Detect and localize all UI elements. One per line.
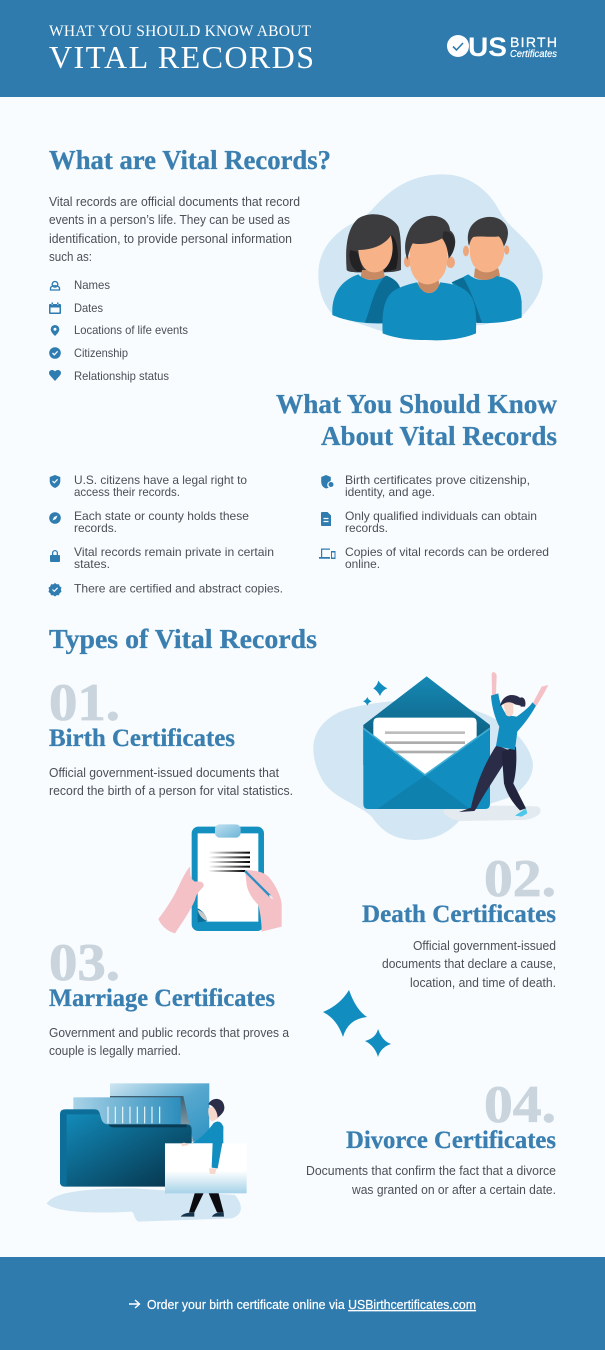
- facts text right column: records.: [345, 521, 388, 535]
- record 01: birth certificates: Official government-issued documents that: [49, 766, 280, 780]
- facts text left column: Vital records remain private in certain: [74, 545, 274, 559]
- icon: arrow: [129, 1300, 140, 1308]
- record 04: divorce certificates: Documents that confirm the fact that a divorce: [306, 1164, 556, 1178]
- intro paragraph: Vital records are official documents that record: [49, 195, 300, 209]
- intro paragraph: identification, to provide personal information: [49, 232, 292, 246]
- man right: [452, 217, 522, 323]
- facts text left column: access their records.: [74, 485, 180, 499]
- facts text right column: online.: [345, 557, 380, 571]
- header title: WHAT YOU SHOULD KNOW ABOUT: [49, 23, 312, 40]
- record 01: birth certificates: record the birth of a person for vital statistics.: [49, 784, 293, 798]
- record 01: birth certificates: Birth Certificates: [49, 725, 235, 752]
- logo: US Birth Certificates: [447, 32, 557, 62]
- illustration: clipboard and hands: [158, 824, 282, 933]
- record 04: divorce certificates: Divorce Certificates: [346, 1127, 556, 1154]
- facts text left column: [74, 473, 283, 596]
- illustration: folder and carrying man: [47, 1083, 247, 1222]
- man centre: [382, 216, 476, 340]
- intro paragraph: such as:: [49, 250, 92, 264]
- facts text right column: Only qualified individuals can obtain: [345, 509, 537, 523]
- heading: What are Vital Records: What are Vital Records?: [49, 145, 331, 175]
- list: personal information: [49, 278, 188, 383]
- logo: US Birth Certificates: US: [468, 32, 507, 62]
- woman: [332, 214, 401, 323]
- record 02: death certificates: 02.: [484, 850, 556, 908]
- record 02: death certificates: location, and time of death.: [410, 976, 556, 990]
- list labels: Dates: [74, 301, 103, 315]
- record 03: marriage certificates: [49, 934, 289, 1058]
- record 02: death certificates: Death Certificates: [362, 901, 556, 928]
- facts text right column: [345, 473, 549, 571]
- heading: Types of Vital Records: Types of Vital Records: [49, 624, 317, 654]
- logo: US Birth Certificates: Certificates: [510, 49, 557, 60]
- header banner: [0, 0, 605, 97]
- list labels: [74, 278, 188, 383]
- cheering woman: [459, 672, 548, 817]
- intro paragraph: events in a person’s life. They can be used as: [49, 213, 290, 227]
- record 03: marriage certificates: couple is legally married.: [49, 1044, 181, 1058]
- icon: sparkles: [323, 990, 391, 1057]
- list labels: Citizenship: [74, 346, 128, 360]
- record 04: divorce certificates: 04.: [484, 1076, 556, 1134]
- record 02: death certificates: documents that declare a cause,: [382, 957, 556, 971]
- footer call to action: Order your birth certificate online via USBirthcertificates.com: [147, 1298, 476, 1312]
- header title: [49, 23, 314, 75]
- heading: What You Should Know About Vital Records: What You Should Know: [276, 389, 558, 419]
- list icons: [49, 282, 61, 381]
- illustration: three people: [318, 174, 543, 340]
- facts text left column: Each state or county holds these: [74, 509, 249, 523]
- record 03: marriage certificates: Marriage Certificates: [49, 985, 275, 1012]
- facts text right column: Birth certificates prove citizenship,: [345, 473, 530, 487]
- list labels: Relationship status: [74, 369, 169, 383]
- illustration: envelope and cheering woman: [313, 672, 548, 840]
- list labels: Names: [74, 278, 110, 292]
- logo: US Birth Certificates: BIRTH: [510, 34, 557, 50]
- footer banner: [0, 1257, 605, 1350]
- record 04: divorce certificates: was granted on or after a certain date.: [351, 1183, 556, 1197]
- record 01: birth certificates: [49, 674, 293, 798]
- facts text right column: Copies of vital records can be ordered: [345, 545, 549, 559]
- fact icons: [48, 475, 336, 596]
- facts text left column: records.: [74, 521, 117, 535]
- header title: VITAL RECORDS: [49, 39, 314, 75]
- record 02: death certificates: Official government-issued: [413, 939, 556, 953]
- list labels: Locations of life events: [74, 323, 188, 337]
- heading: What You Should Know About Vital Records: About Vital Records: [321, 421, 557, 451]
- record 01: birth certificates: 01.: [49, 674, 120, 732]
- facts text left column: There are certified and abstract copies.: [74, 582, 283, 596]
- record 02: death certificates: [362, 850, 556, 990]
- facts text right column: identity, and age.: [345, 485, 435, 499]
- facts text left column: states.: [74, 557, 110, 571]
- intro paragraph: [49, 195, 300, 264]
- heading: What You Should Know About Vital Records: [276, 389, 558, 451]
- record 03: marriage certificates: 03.: [49, 934, 120, 992]
- facts text left column: U.S. citizens have a legal right to: [74, 473, 247, 487]
- record 03: marriage certificates: Government and public records that proves a: [49, 1026, 289, 1040]
- record 04: divorce certificates: [306, 1076, 556, 1197]
- facts list: [48, 473, 549, 596]
